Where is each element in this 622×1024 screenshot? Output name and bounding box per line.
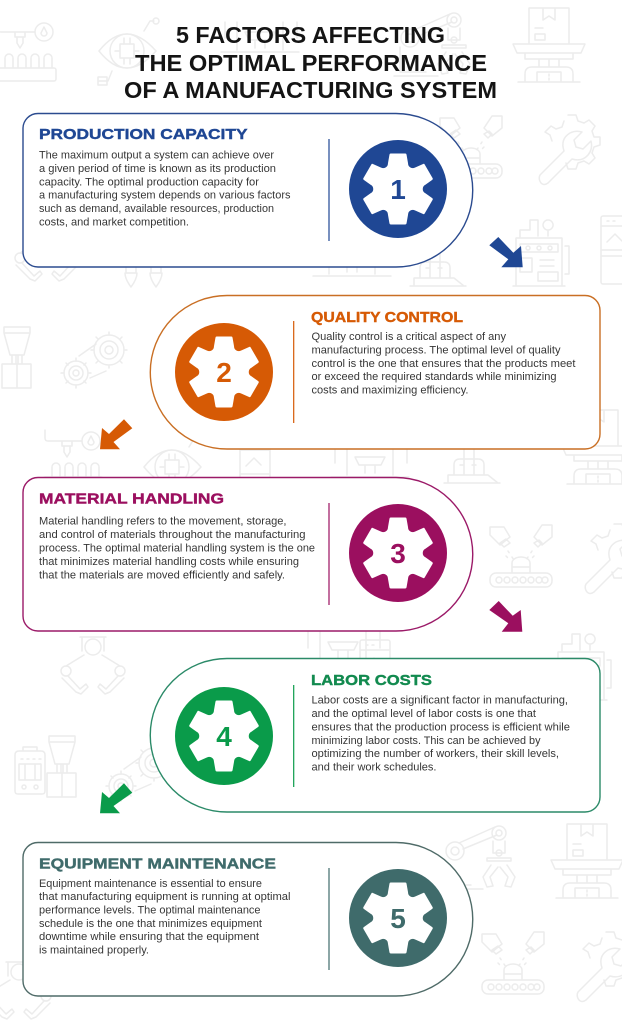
panel: equipment maintenance [23,842,473,996]
icon: gear number 5 [349,869,447,967]
text block: labor costs: optimizing the number of workers, their skill levels, [312,748,559,760]
icon: gear number 4 [175,687,273,785]
text block: labor costs: Labor costs are a significant factor in manufacturing, [312,694,568,706]
icon: gear number 1 [349,140,447,238]
icon: gear number 3: 3 [390,538,406,569]
icon: gear number 3 [349,504,447,602]
text block: quality control: or exceed the required standards while minimizing [312,371,556,383]
text block: material handling: that the materials are moved efficiently and safely. [39,570,285,582]
text block: equipment maintenance: downtime while ensuring that the equipment [39,931,259,943]
text block: production capacity [39,150,291,228]
icon: gear number 1: 1 [390,174,406,205]
text block: labor costs: and their work schedules. [312,762,436,774]
title: THE OPTIMAL PERFORMANCE [135,50,487,76]
text block: production capacity: The maximum output a system can achieve over [39,150,274,162]
panel: labor costs [150,658,600,812]
panel: material handling [23,478,473,631]
text block: quality control: costs and maximizing efficiency. [312,384,468,396]
arrow: to quality control [489,237,523,267]
text block: quality control: manufacturing process. The optimal level of quality [312,344,561,356]
text block: labor costs: ensures that the production process is efficient while [312,722,570,734]
heading: equipment maintenance: EQUIPMENT MAINTENANCE [39,856,276,872]
text block: production capacity: a manufacturing system depends on various factors [39,190,291,202]
arrow: to equipment maintenance [100,783,132,813]
arrow: to labor costs [489,601,522,632]
heading: production capacity: PRODUCTION CAPACITY [39,126,248,143]
text block: production capacity: capacity. The optimal production capacity for [39,176,259,188]
icon: gear number 2: 2 [216,357,232,388]
text block: equipment maintenance: performance levels. The optimal maintenance [39,904,260,916]
icon: gear number 5: 5 [390,903,406,934]
text block: equipment maintenance [39,878,290,956]
text block: labor costs [312,694,570,774]
text block: material handling: Material handling refers to the movement, storage, [39,516,286,528]
heading: material handling: MATERIAL HANDLING [39,490,224,508]
text block: material handling: and control of materials throughout the manufacturing [39,529,306,541]
text block: production capacity: a given period of time is known as its production [39,163,276,175]
text block: equipment maintenance: schedule is the one that minimizes equipment [39,918,262,930]
text block: quality control [312,331,576,396]
text block: material handling: process. The optimal material handling system is the one [39,542,315,554]
icon: gear number 2 [175,323,273,421]
panel: quality control [150,296,600,449]
text block: labor costs: minimizing labor costs. This can be achieved by [312,735,541,747]
text block: equipment maintenance: that manufacturing equipment is running at optimal [39,891,290,903]
title: OF A MANUFACTURING SYSTEM [124,77,497,103]
text block: material handling: that minimizes material handling costs while ensuring [39,556,299,568]
text block: equipment maintenance: is maintained properly. [39,944,149,956]
text block: quality control: control is the one that ensures that the products meet [312,358,576,370]
text block: material handling [39,516,315,582]
text block: production capacity: costs, and market competition. [39,216,189,228]
text block: quality control: Quality control is a critical aspect of any [312,331,506,343]
text block: equipment maintenance: Equipment maintenance is essential to ensure [39,878,262,890]
text block: labor costs: and the optimal level of labor costs is one that [312,708,536,720]
heading: quality control: QUALITY CONTROL [311,309,463,326]
text block: production capacity: such as demand, available resources, production [39,203,274,215]
icon: gear number 4: 4 [216,721,232,752]
arrow: to material handling [100,419,132,449]
title [124,22,497,103]
heading: labor costs: LABOR COSTS [311,672,432,689]
title: 5 FACTORS AFFECTING [176,22,445,48]
panel: production capacity [23,114,473,267]
